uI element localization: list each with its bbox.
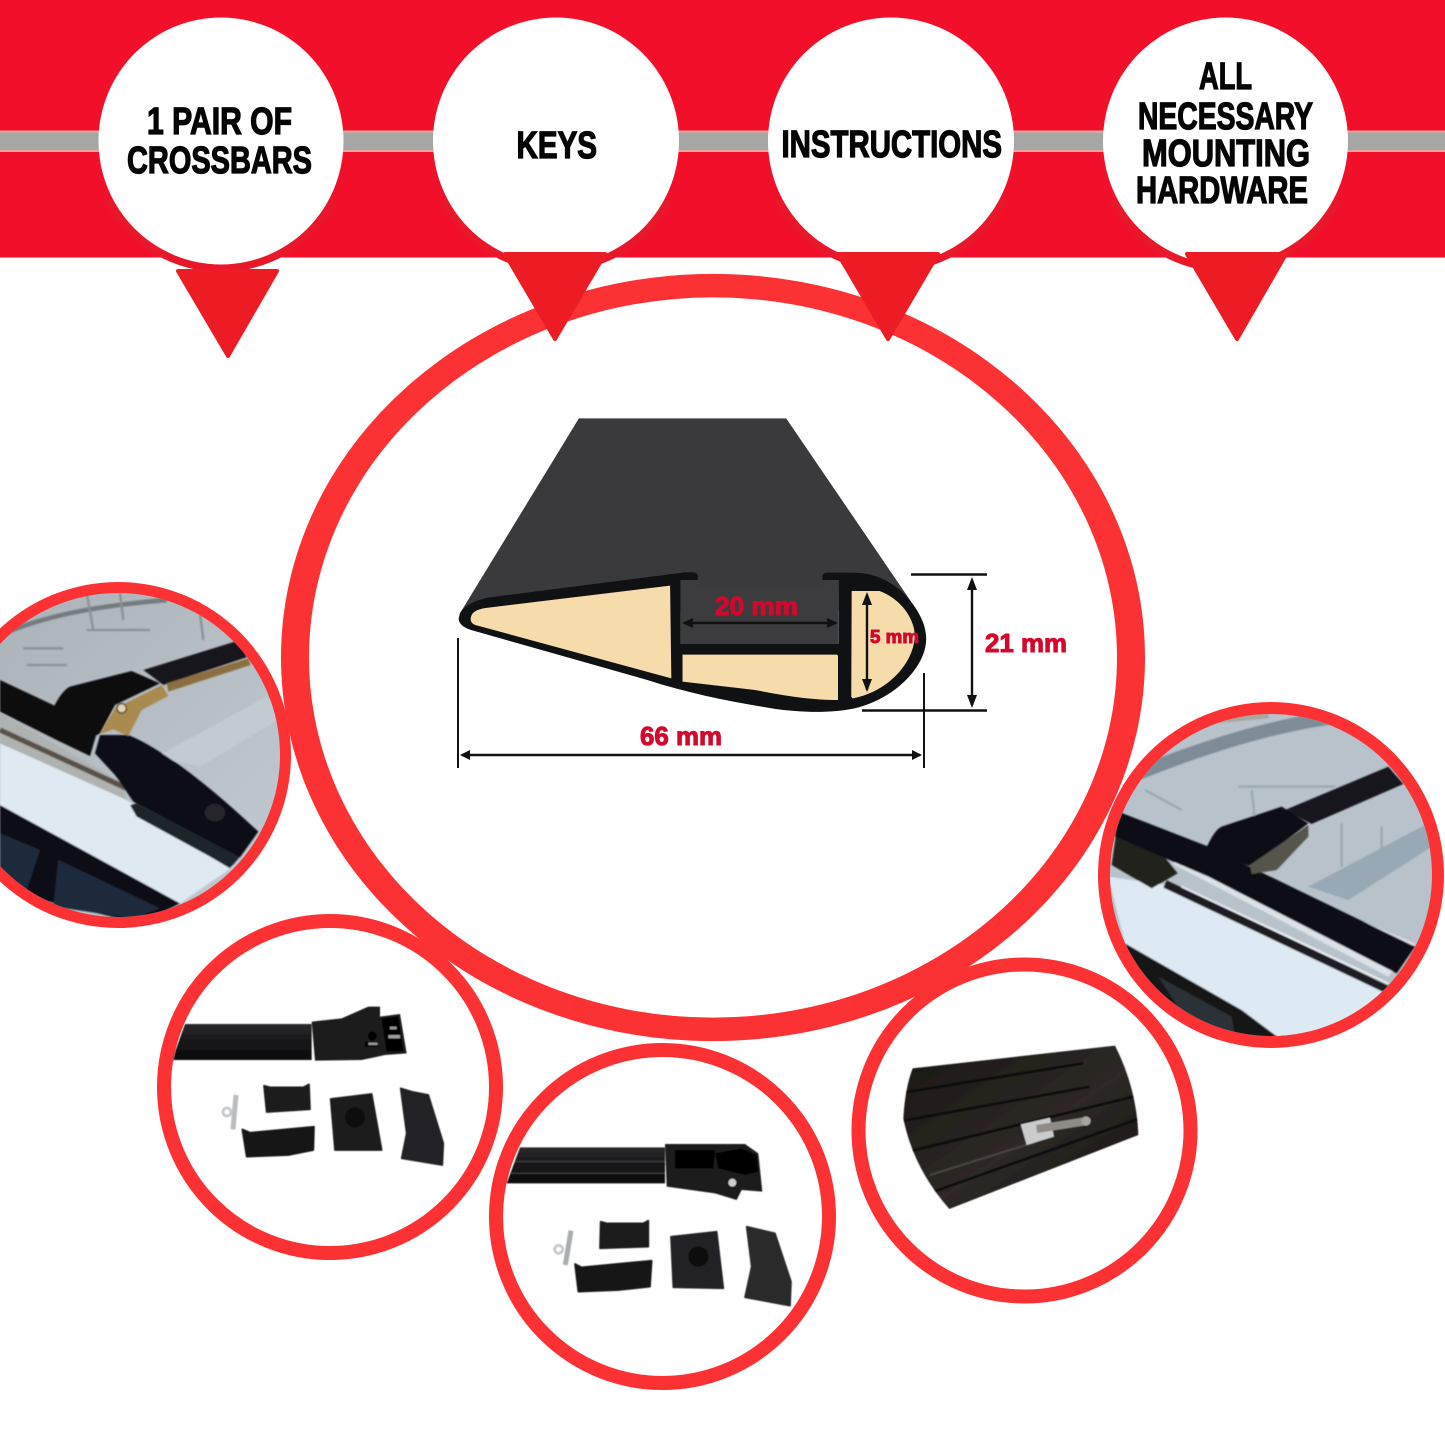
clamp end — [665, 1144, 762, 1200]
main ring — [281, 274, 1145, 1041]
photo circle: bar channel with bolt — [858, 964, 1190, 1296]
label: 1 pair of crossbars: 1 PAIR OF — [147, 101, 292, 143]
profile drawing — [459, 418, 926, 712]
photo circle: black crossbar with parts, version one — [164, 921, 496, 1253]
label: all necessary mounting hardware: NECESSARY — [1138, 96, 1313, 138]
pad two — [242, 1127, 314, 1157]
bubble: all necessary mounting hardware — [1094, 10, 1356, 339]
dimension: 21 mm: 21 mm — [985, 628, 1067, 658]
bolt plate — [1021, 1118, 1054, 1145]
photo circle: bar on car, gold clamp — [0, 582, 291, 930]
grooves highlight — [930, 1142, 1037, 1175]
bar — [173, 1024, 312, 1060]
clamp end — [312, 1007, 407, 1061]
dimension: 5 mm: 5 mm — [870, 627, 919, 647]
cover — [401, 1088, 443, 1165]
photo circle: bar on car, black clamp — [1098, 702, 1445, 1050]
cross-section diagram — [458, 418, 1067, 768]
bubble: keys — [425, 10, 687, 339]
photo circle: ribbed crossbar with parts, version two — [496, 1050, 829, 1383]
grooves — [902, 1063, 1140, 1192]
pad one — [264, 1084, 310, 1112]
dimension: 20 mm: 20 mm — [715, 591, 798, 621]
pad two — [575, 1261, 652, 1292]
label: instructions: INSTRUCTIONS — [782, 124, 1002, 166]
bar — [507, 1147, 665, 1183]
pad one — [600, 1221, 648, 1248]
dimension lines — [458, 574, 987, 768]
label: 1 pair of crossbars: CROSSBARS — [127, 140, 312, 182]
pointer: hardware — [1187, 254, 1286, 339]
cover — [745, 1227, 791, 1306]
bolt — [1037, 1116, 1091, 1129]
bolt — [223, 1095, 236, 1129]
bubble: instructions — [760, 10, 1022, 339]
pointer: keys — [505, 254, 605, 339]
label: keys: KEYS — [516, 125, 597, 167]
bubble: 1 pair of crossbars — [90, 10, 352, 356]
bolt — [555, 1231, 571, 1265]
pointer: instructions — [838, 254, 938, 339]
label: all necessary mounting hardware: HARDWARE — [1136, 170, 1308, 212]
label: all necessary mounting hardware: ALL — [1199, 56, 1252, 98]
banner — [0, 0, 1445, 258]
mount plate — [671, 1232, 723, 1288]
label: all necessary mounting hardware: MOUNTING — [1142, 133, 1310, 175]
pointer: crossbars — [178, 271, 277, 356]
dimension: 66 mm: 66 mm — [640, 721, 722, 751]
mount plate — [331, 1094, 382, 1150]
bar section — [903, 1046, 1138, 1209]
